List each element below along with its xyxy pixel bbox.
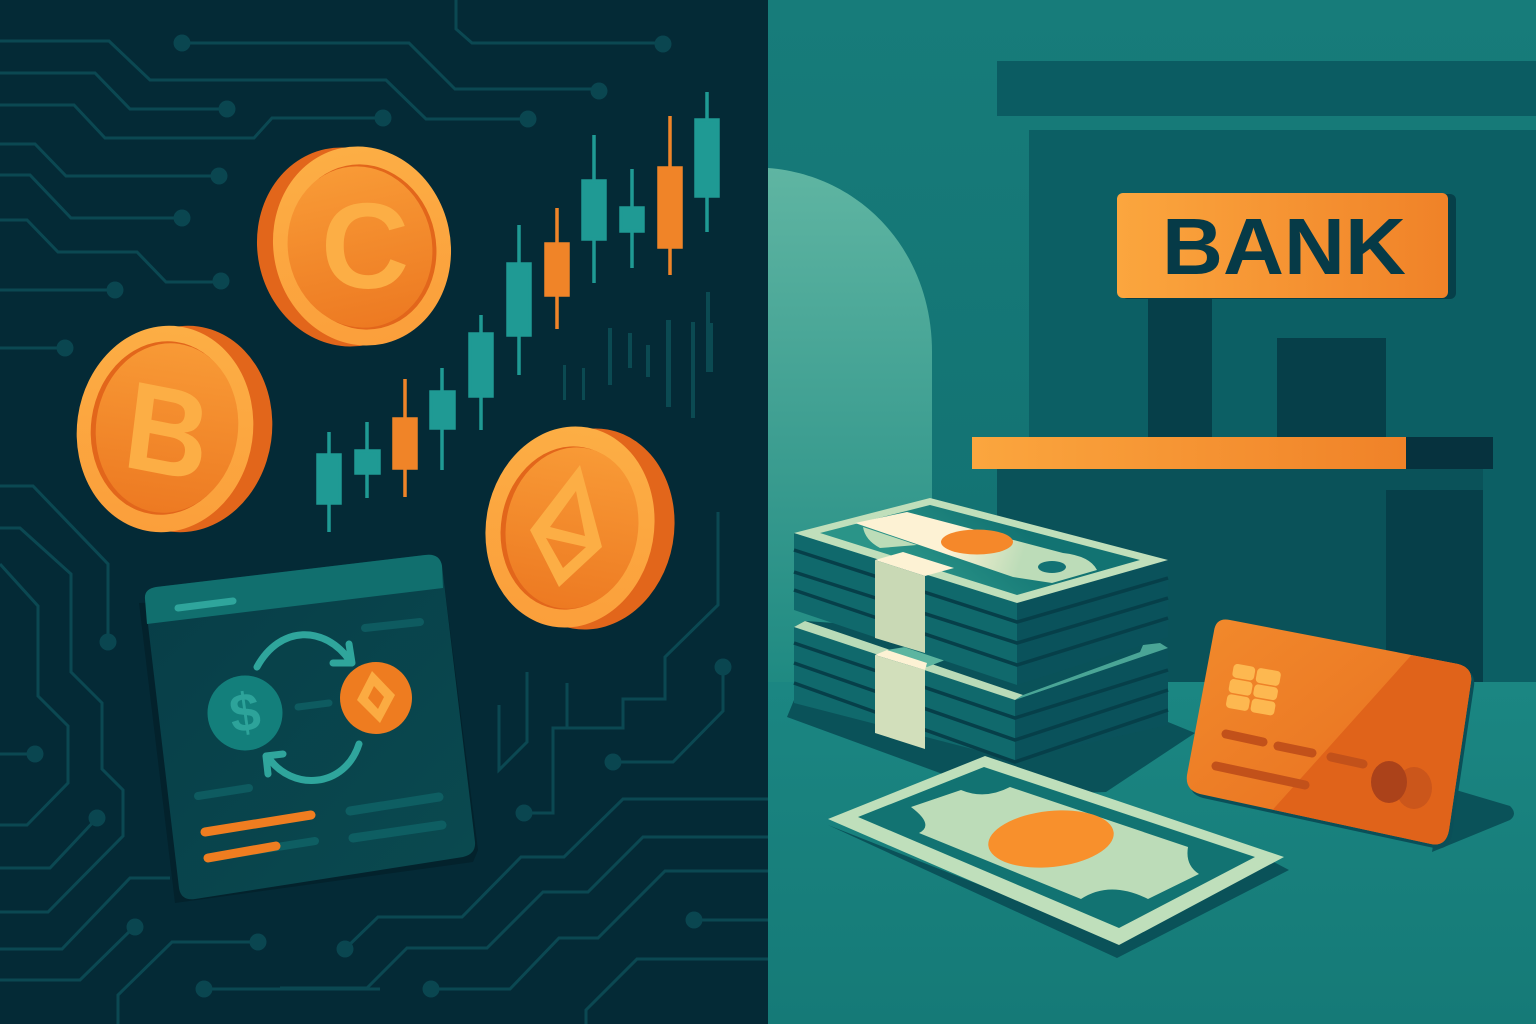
shadow: credit card — [1432, 790, 1514, 852]
bank building — [997, 61, 1536, 682]
letter C: C — [321, 178, 409, 314]
coin: B — [63, 314, 286, 544]
loose banknote — [828, 756, 1284, 945]
coin: C — [239, 130, 469, 363]
bank sign: BANK — [1162, 202, 1406, 291]
diamond glyph — [530, 465, 602, 587]
letter B: B — [118, 354, 217, 509]
lower stack — [794, 627, 1015, 760]
panel: bank background — [768, 0, 1536, 1024]
bank counter — [972, 437, 1493, 469]
cash stack — [794, 498, 1168, 762]
candlestick chart — [318, 92, 718, 532]
upper band — [875, 560, 925, 653]
app text lines — [178, 601, 442, 858]
exchange arrows — [257, 635, 359, 780]
dollar token — [208, 676, 282, 750]
shadow: cash stack — [787, 700, 1195, 795]
credit card — [1187, 619, 1480, 860]
top bill — [794, 498, 1168, 603]
card details — [1216, 734, 1363, 785]
upper stack — [794, 533, 1017, 685]
panel: exchange app — [139, 555, 478, 903]
band flap — [875, 552, 954, 576]
archway — [768, 168, 932, 682]
floor — [768, 682, 1536, 1024]
dollar token: $ — [226, 681, 264, 745]
lower band — [875, 655, 925, 749]
panel: crypto background — [0, 0, 768, 1024]
diamond token — [340, 662, 412, 734]
bank sign — [1117, 193, 1456, 299]
card logo — [1396, 767, 1432, 809]
circuit traces — [0, 0, 768, 1024]
shadow: loose bill — [828, 825, 1289, 958]
circuit nodes — [26, 34, 732, 998]
faint background candlesticks — [563, 292, 713, 418]
chip — [1225, 663, 1281, 716]
coin: diamond — [470, 413, 690, 643]
